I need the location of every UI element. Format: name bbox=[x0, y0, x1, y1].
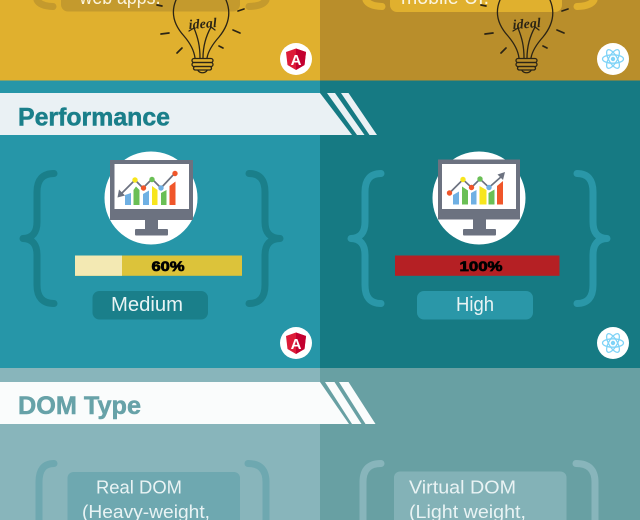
rating pill: High bbox=[417, 291, 533, 320]
braces bbox=[363, 464, 595, 520]
rating pill: Medium: Medium bbox=[111, 294, 183, 316]
description box bbox=[394, 472, 566, 520]
badge: Angular logo: A bbox=[291, 52, 302, 69]
badge: React logo bbox=[597, 43, 629, 75]
panel: performance, React bbox=[320, 80, 640, 368]
braces bbox=[351, 174, 607, 304]
icon: idea light bulb bbox=[481, 0, 568, 73]
panel: DOM type, Angular bbox=[0, 368, 320, 520]
panel: performance, Angular bbox=[0, 80, 320, 368]
text pill bbox=[390, 0, 562, 12]
icon: idea light bulb: ideal bbox=[188, 15, 217, 32]
badge: React logo bbox=[597, 327, 629, 359]
description box: Virtual DOM bbox=[409, 476, 516, 498]
panel: DOM type, React bbox=[320, 368, 640, 520]
progress bar: 60% bbox=[75, 256, 242, 276]
panel: ideal section, React bbox=[320, 0, 640, 80]
description box bbox=[68, 472, 240, 520]
icon: monitor with chart, falling arrow bbox=[104, 152, 198, 244]
icon: monitor with chart, rising arrow bbox=[432, 152, 526, 244]
text pill bbox=[61, 0, 240, 12]
heading banner: DOM Type bbox=[0, 382, 376, 424]
badge: Angular logo bbox=[280, 327, 312, 359]
progress bar: 100%: 100% bbox=[460, 259, 502, 274]
icon: idea light bulb: ideal bbox=[512, 15, 541, 32]
heading banner: Performance: Performance bbox=[18, 104, 170, 132]
progress bar: 60%: 60% bbox=[152, 259, 184, 274]
rating pill: High: High bbox=[456, 294, 494, 316]
brace fragments bbox=[366, 0, 594, 6]
badge: Angular logo bbox=[280, 43, 312, 75]
left brace fragment bbox=[37, 0, 266, 6]
badge: Angular logo: A bbox=[291, 336, 302, 353]
rating pill: Medium bbox=[92, 291, 208, 320]
icon: idea light bulb bbox=[157, 0, 244, 73]
braces bbox=[23, 174, 280, 304]
progress bar: 100% bbox=[395, 256, 560, 276]
braces bbox=[39, 464, 266, 520]
panel: ideal section, Angular bbox=[0, 0, 320, 80]
heading banner: Performance bbox=[0, 93, 377, 135]
heading banner: DOM Type: DOM Type bbox=[18, 392, 141, 420]
description box: Real DOM bbox=[96, 476, 182, 498]
